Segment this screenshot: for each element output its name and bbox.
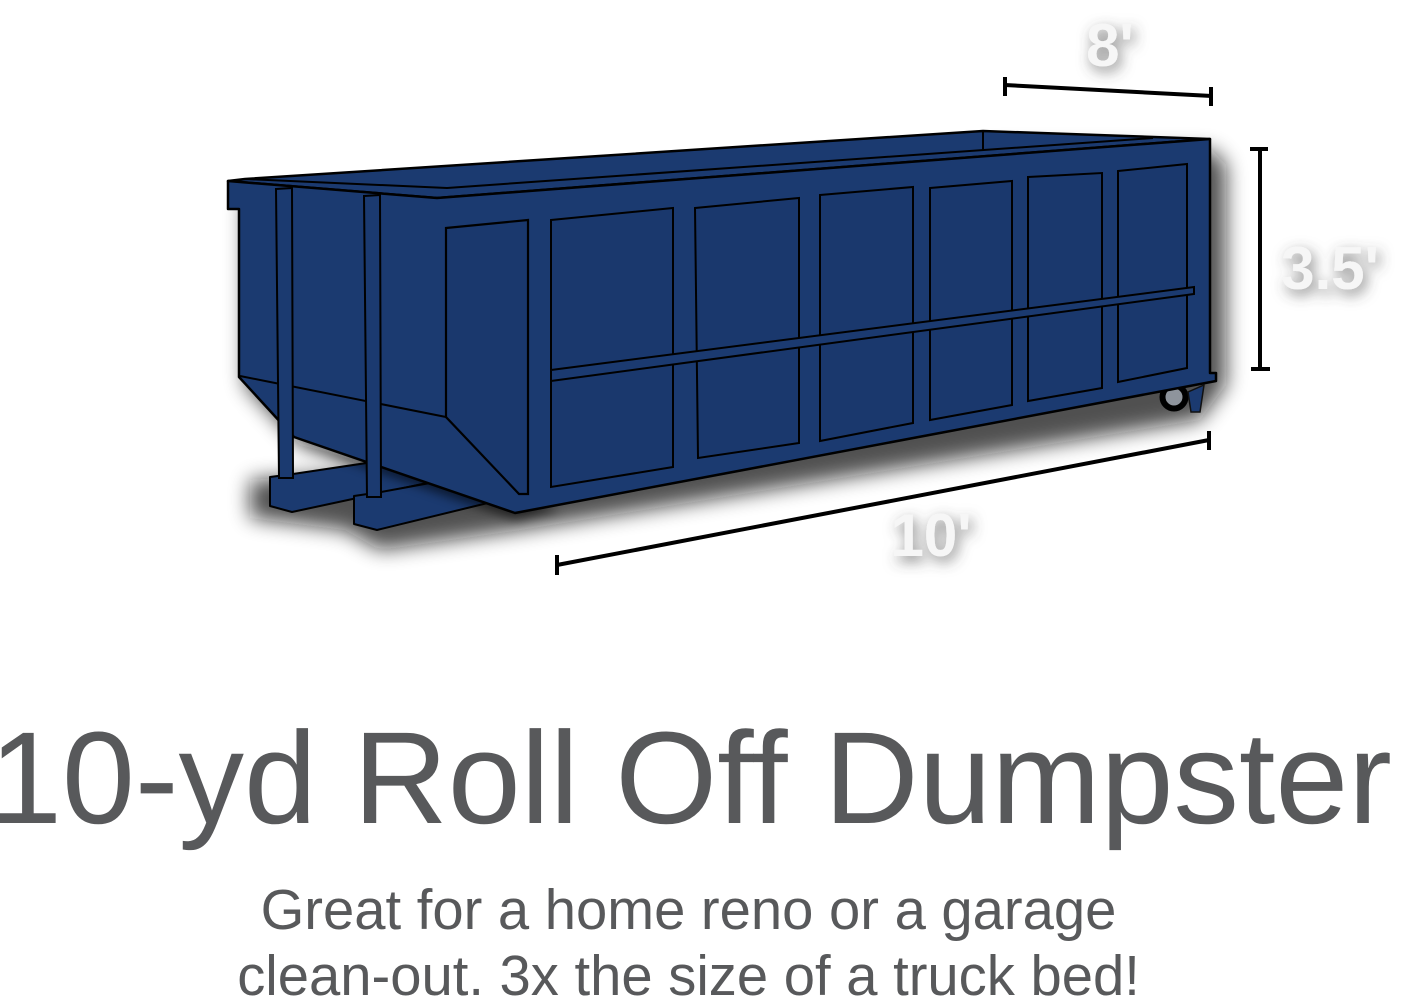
rear post — [276, 188, 293, 478]
dumpster body — [228, 139, 1216, 513]
label: 10 ft: 10' — [890, 502, 972, 569]
front post — [364, 195, 381, 497]
label: 8 ft: 8' — [1086, 12, 1134, 79]
horizontal rail — [551, 287, 1194, 381]
label: 3.5 ft: 3.5' — [1281, 235, 1379, 302]
end gusset panel — [446, 220, 528, 494]
title: 10-yd Roll Off Dumpster — [0, 704, 1392, 851]
side panels — [551, 164, 1187, 487]
dimension line: height 3.5 ft — [1250, 149, 1270, 369]
dimension line: length 10 ft — [557, 431, 1209, 575]
rear skid foot — [270, 452, 480, 512]
front skid foot — [354, 483, 500, 530]
dimension line: width 8 ft — [1005, 77, 1212, 106]
dumpster interior and rim — [228, 131, 1210, 198]
rim inner lines — [240, 131, 1153, 417]
description — [237, 878, 1140, 996]
wheel bracket — [1188, 385, 1204, 412]
wheel — [1162, 386, 1186, 408]
description: Great for a home reno or a garage — [261, 878, 1116, 941]
shadow of body on the skids — [300, 445, 560, 520]
dumpster illustration — [228, 131, 1226, 550]
drop shadow — [245, 150, 1226, 550]
